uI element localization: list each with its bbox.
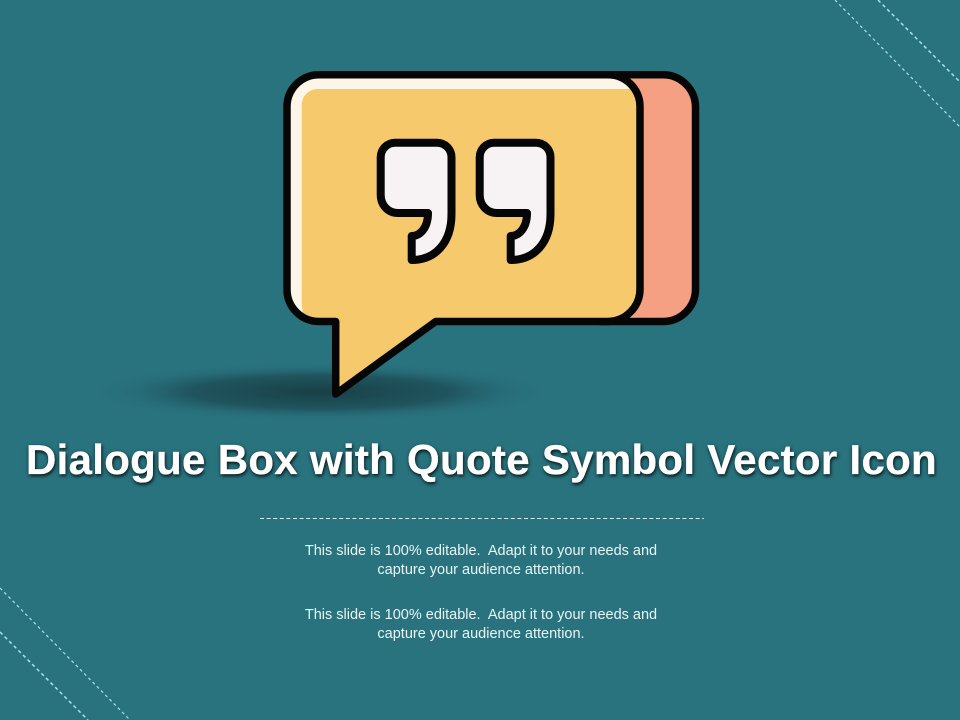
text block 2 <box>305 607 657 642</box>
bubble ground shadow <box>84 362 556 422</box>
diagonal dashes: top right <box>835 0 960 127</box>
front bubble outline <box>287 75 640 394</box>
text block 2: This slide is 100% editable. Adapt it to your needs and <box>305 607 657 623</box>
icon: speech bubble with quote marks <box>287 75 696 394</box>
text block 1: capture your audience attention. <box>377 562 585 578</box>
front bubble yellow fill <box>302 89 660 394</box>
title: Dialogue Box with Quote Symbol Vector Icon <box>26 436 937 483</box>
text block 2: capture your audience attention. <box>377 626 585 642</box>
text block 1: This slide is 100% editable. Adapt it to your needs and <box>305 543 657 559</box>
icon: left quote mark <box>381 143 452 260</box>
dashed divider <box>260 518 704 520</box>
front bubble highlight <box>287 75 640 394</box>
text block 1 <box>305 543 657 578</box>
icon: right quote mark <box>480 143 550 260</box>
back bubble <box>600 75 696 322</box>
diagonal dashes: bottom left <box>0 588 130 720</box>
